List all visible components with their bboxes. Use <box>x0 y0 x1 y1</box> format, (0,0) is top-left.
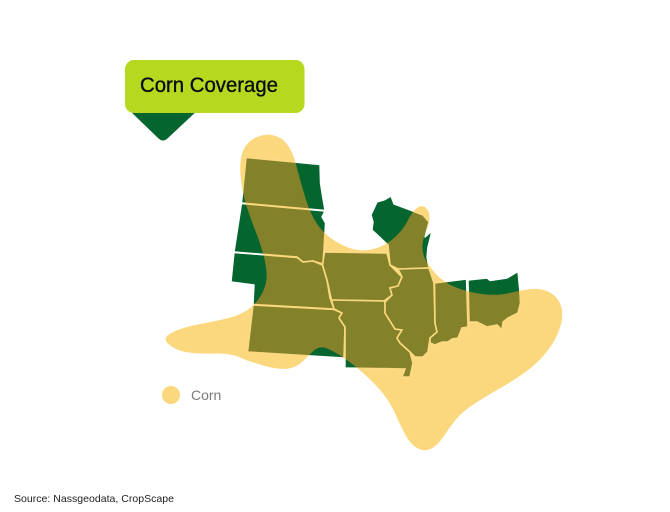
state: South Dakota <box>234 204 326 264</box>
state: Iowa <box>322 252 402 301</box>
title: Corn Coverage <box>140 74 278 97</box>
title callout <box>125 60 304 140</box>
state: Illinois <box>385 268 437 357</box>
state: Wisconsin <box>371 196 432 269</box>
legend label: Corn <box>191 387 221 403</box>
state: Ohio <box>468 272 520 330</box>
state: Nebraska <box>231 252 334 309</box>
map: midwest states <box>231 158 520 377</box>
legend swatch <box>162 386 180 404</box>
state: Kansas <box>248 305 345 358</box>
map overlay: corn-growing areas within states <box>231 158 520 377</box>
state: North Dakota <box>242 158 325 210</box>
legend <box>162 386 221 404</box>
state: Indiana <box>430 279 468 345</box>
source note: Source: Nassgeodata, CropScape <box>14 493 174 505</box>
callout pointer <box>127 108 200 140</box>
callout box <box>125 60 304 113</box>
state: Missouri <box>332 300 413 377</box>
corn coverage blob <box>166 135 562 450</box>
